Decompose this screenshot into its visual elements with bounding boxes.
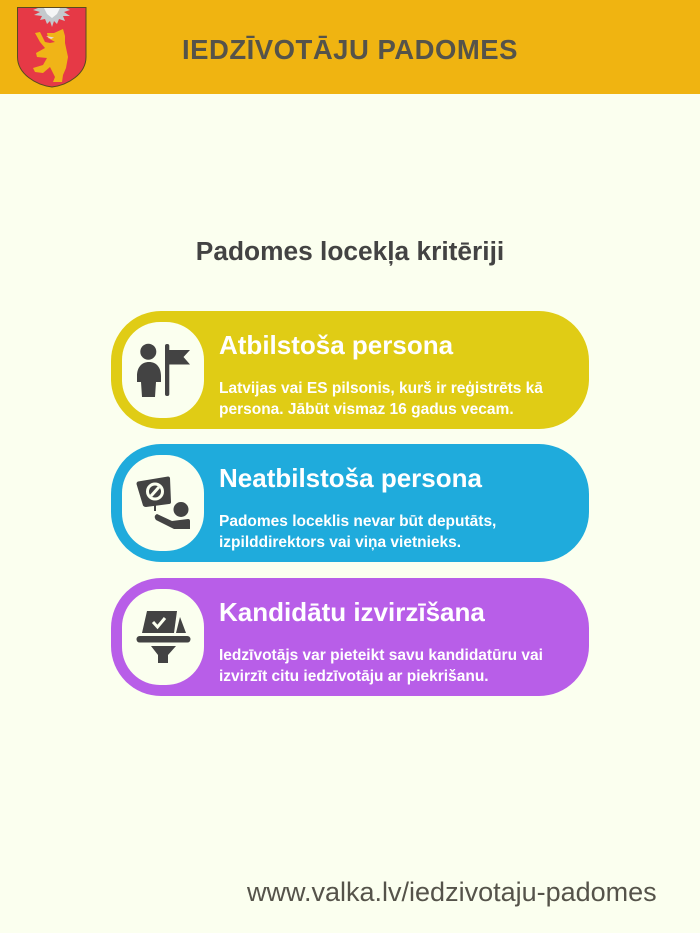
icon: person with flag [122, 322, 204, 418]
description: Latvijas vai ES pilsonis, kurš ir reģistrēts kā [219, 380, 543, 397]
description: Padomes loceklis nevar būt deputāts, [219, 513, 496, 530]
description [219, 647, 543, 685]
panel: ineligible person [111, 444, 589, 562]
icon: voting booth [122, 589, 204, 685]
description: izpilddirektors vai viņa vietnieks. [219, 534, 461, 551]
heading: Kandidātu izvirzīšana [219, 597, 485, 627]
description: persona. Jābūt vismaz 16 gadus vecam. [219, 401, 514, 418]
panel: nomination of candidates [111, 578, 589, 696]
header band [0, 0, 700, 94]
description: Iedzīvotājs var pieteikt savu kandidatūru vai [219, 647, 543, 664]
description: izvirzīt citu iedzīvotāju ar piekrišanu. [219, 668, 489, 685]
header title: IEDZĪVOTĀJU PADOMES [182, 34, 518, 65]
section heading: Padomes locekļa kritēriji [196, 236, 504, 266]
icon: prohibition sign and person [122, 455, 204, 551]
heading: Neatbilstoša persona [219, 463, 482, 493]
description [219, 380, 543, 418]
website URL: www.valka.lv/iedzivotaju-padomes [247, 877, 657, 907]
coat of arms [17, 7, 86, 88]
panel: eligible person [111, 311, 589, 429]
description [219, 513, 496, 551]
heading: Atbilstoša persona [219, 330, 453, 360]
